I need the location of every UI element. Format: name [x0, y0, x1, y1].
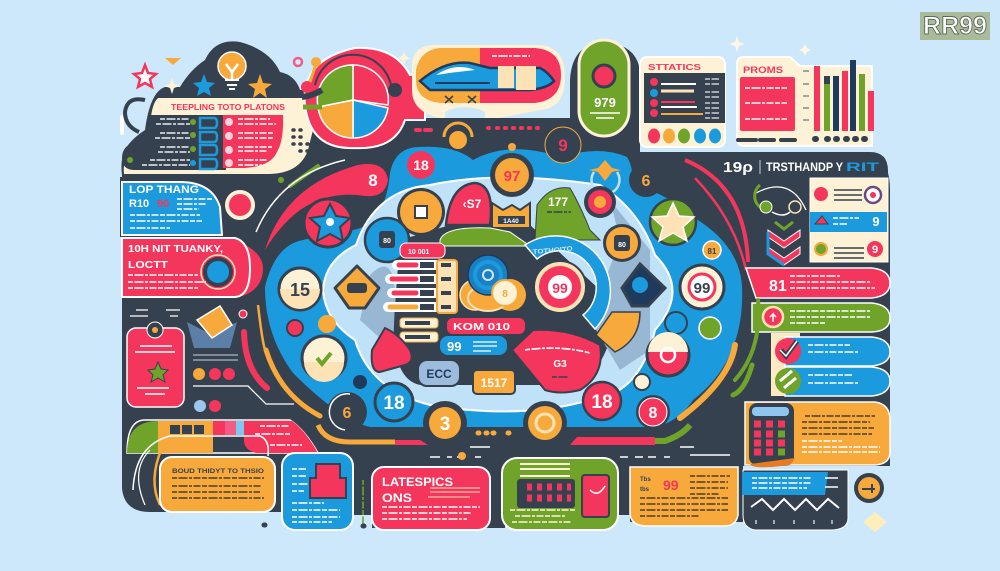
row dots	[478, 430, 509, 436]
panel: top left platforms	[122, 52, 320, 186]
red list panel	[223, 115, 283, 168]
gray-blue patch	[360, 200, 650, 370]
pill: 99	[440, 336, 507, 355]
badge: 8 red lower: 8	[649, 405, 658, 422]
panel: red tournament: LOCTT	[128, 259, 169, 271]
lower connector dashes	[430, 447, 730, 457]
heading: trust bar: 19ρ	[723, 159, 753, 176]
icon: light bulb	[218, 52, 246, 89]
panel: red tournament	[122, 238, 263, 298]
panel: latest picks: ONS	[382, 493, 412, 505]
badge: 177	[535, 188, 600, 240]
bar list	[650, 78, 719, 118]
panel: lower-left dark with tag and icons	[127, 305, 320, 416]
numbered badges ring	[279, 123, 724, 445]
pill: ECC	[418, 360, 460, 386]
big 99 target with blue arc	[525, 236, 610, 329]
central blue blob	[265, 147, 742, 427]
icon: blue star	[193, 74, 215, 96]
badge: 3	[423, 401, 467, 445]
red pill heading: 10 001	[408, 249, 430, 256]
badge: green banner	[440, 228, 530, 246]
icon: blue spiral	[460, 255, 526, 311]
panel: latest picks	[372, 467, 490, 530]
pill: KOM 010	[447, 318, 525, 334]
badge: target	[523, 401, 567, 445]
bar chart	[803, 60, 874, 139]
pill: 99: 99	[447, 339, 461, 354]
panel: latest picks: LATESPICS	[382, 477, 453, 489]
heading: trust bar	[640, 152, 888, 190]
big 99 target with blue arc: 99	[552, 280, 568, 296]
panel: promos with bar chart: PROMS	[743, 65, 783, 76]
panel: train banner	[412, 45, 565, 118]
icon: orange star arc	[589, 160, 621, 194]
pill: ECC: ECC	[426, 367, 452, 381]
dots	[293, 130, 308, 151]
badge: S7	[446, 183, 491, 225]
dark list panel	[122, 115, 226, 170]
badge: check	[302, 336, 346, 382]
badge: star	[304, 199, 352, 247]
banner	[492, 203, 530, 228]
panel: orange text card with 99: Tbs	[640, 477, 651, 483]
panel: blue info: LOP THANG	[129, 184, 199, 196]
colour bar panel	[127, 420, 318, 453]
panel: green number pill	[579, 40, 629, 136]
orange blob right	[596, 312, 640, 352]
panel: green device	[502, 458, 618, 530]
badge: arc orange	[444, 123, 472, 151]
panel: right list cream: 9	[872, 244, 878, 256]
decorative bottom dots	[264, 525, 364, 526]
badge: smile	[584, 186, 616, 218]
panel: orange text card with 99	[630, 467, 738, 526]
badge: 97	[490, 153, 534, 197]
panel: promos with bar chart	[737, 57, 874, 146]
red blob left	[372, 328, 412, 372]
panel: blue info	[120, 177, 222, 237]
badge: 80 blue	[365, 218, 409, 262]
icon: orange star	[248, 74, 272, 98]
badge: S7: ‹S7	[463, 197, 482, 211]
badge: 80 blue: 80	[383, 238, 391, 245]
pill: 1517	[473, 370, 515, 394]
panel: blue card	[282, 453, 353, 530]
dark centre	[393, 225, 610, 388]
lower swoosh	[318, 425, 395, 442]
icon: red box	[310, 464, 346, 498]
panel: blue row one	[775, 337, 890, 366]
badge: 3: 3	[440, 414, 450, 435]
panel: blue strip with zigzag	[742, 470, 848, 530]
badge: 18 red: 18	[413, 157, 429, 173]
badge: 18 red lower	[583, 382, 621, 420]
badge: 18 blue	[375, 383, 413, 421]
panel: red 81 pill	[746, 268, 890, 298]
badge: 6 arc: 6	[343, 405, 352, 422]
panel: orange bonus card: BOUD THIDYT TO THSIO	[172, 468, 264, 475]
swoosh arcs	[265, 164, 388, 250]
panel: red tournament: 10H NIT TUANKY,	[128, 243, 223, 255]
badge: green star	[650, 199, 696, 245]
badge: 6 arc	[327, 392, 367, 432]
pill: KOM 010: KOM 010	[453, 322, 511, 333]
panel: blue info: R10	[129, 198, 149, 210]
badge: 8	[356, 165, 386, 195]
icon: red button	[227, 192, 253, 218]
panel: orange text card with 99: tbs	[640, 487, 650, 493]
badge: 8: 8	[368, 171, 378, 190]
badge: 9 dark: 9	[558, 136, 568, 155]
pie chart	[301, 48, 425, 148]
badge: 81	[703, 241, 721, 259]
pill: 1517: 1517	[481, 376, 508, 390]
light inner ring	[323, 178, 672, 411]
panel: right list cream	[810, 178, 888, 262]
centre list	[388, 243, 457, 342]
panel: right list cream: 9	[872, 214, 880, 229]
panel: statistics: STTATICS	[648, 63, 702, 72]
watermark logo: RR99	[923, 12, 987, 40]
badge: 99 right	[680, 265, 724, 309]
panel: calculator and orange text	[745, 402, 890, 467]
badge: red half	[647, 332, 689, 376]
icon: calculator keys	[752, 407, 789, 452]
badge: chip	[397, 188, 445, 236]
panel: green number pill: 979	[594, 95, 616, 110]
badge: 97: 97	[504, 168, 520, 185]
small badges	[287, 312, 721, 390]
decorative stars	[120, 36, 887, 532]
dark background silhouette	[121, 41, 890, 528]
red shield G3	[512, 330, 601, 392]
badge: 18 red lower: 18	[591, 392, 613, 413]
badge: 80 orange: 80	[618, 242, 626, 249]
badge: 8 red lower	[636, 395, 670, 429]
panel: orange text card with 99: 99	[663, 477, 679, 493]
badge: 99 right: 99	[694, 280, 710, 297]
icon: train	[420, 63, 554, 103]
badge: diamond	[335, 266, 379, 308]
right arcs and gadgets	[629, 160, 806, 270]
panel: red 81 pill: 81	[769, 278, 787, 295]
badge: 15: 15	[290, 280, 310, 300]
badge: 18 red	[407, 151, 435, 179]
panel: statistics	[640, 57, 725, 147]
badge: 15	[279, 268, 321, 310]
icon: blue spiral: 8	[502, 289, 508, 300]
banner: 1A40	[503, 218, 519, 225]
red shield G3: G3	[553, 359, 567, 370]
right arcs and gadgets: 6	[642, 173, 651, 190]
panel: blue info: 90	[157, 198, 169, 210]
red tag	[127, 322, 184, 407]
right-side arcs	[735, 300, 759, 380]
panel: orange bonus card	[133, 436, 275, 512]
badge: dark diamond	[622, 264, 665, 306]
dashed dark dots row	[416, 128, 538, 130]
colour dots	[648, 128, 721, 144]
cream title panel	[124, 98, 320, 174]
panel: green row	[752, 303, 890, 332]
heading: TEEPLING TOTO PLATONS	[171, 102, 285, 112]
big 99 target with blue arc: TOTHOITO	[533, 246, 573, 256]
panel: blue row two	[775, 367, 890, 396]
badge: 177: 177	[548, 195, 568, 209]
heading: trust bar: RIT	[846, 162, 879, 174]
badge: 80 orange	[603, 224, 641, 262]
badge: 9 dark	[545, 127, 581, 163]
icon: photo box	[187, 306, 237, 348]
badge: 81: 81	[708, 247, 717, 256]
heading: trust bar: TRSTHANDP Y	[766, 162, 843, 174]
icon: arrow button	[854, 473, 884, 503]
icon row	[193, 355, 294, 412]
badge: 18 blue: 18	[383, 393, 405, 414]
